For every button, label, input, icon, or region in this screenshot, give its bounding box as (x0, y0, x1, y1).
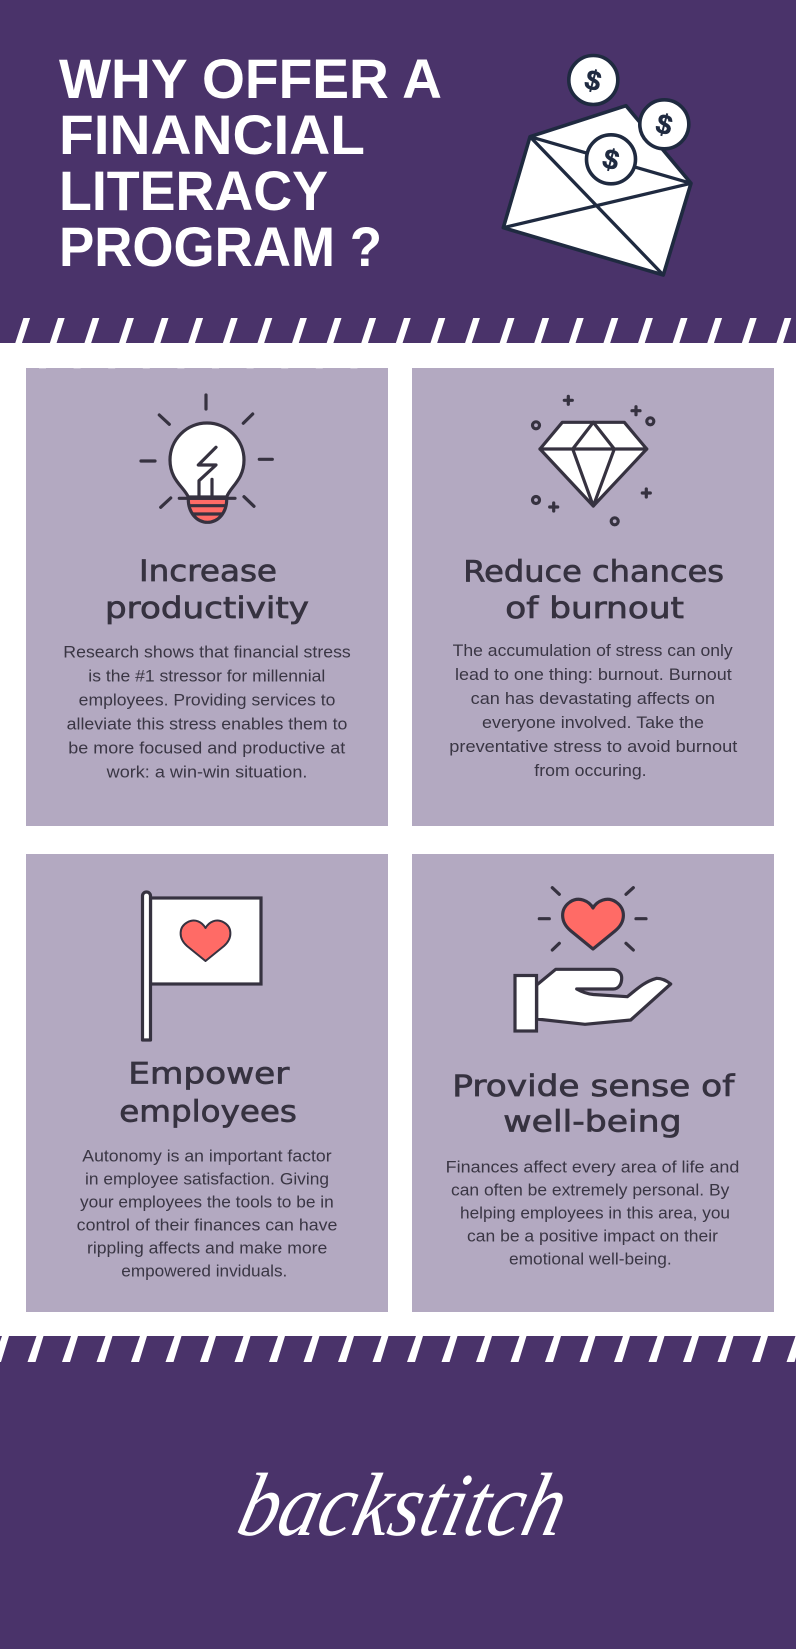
heading: Increase (139, 554, 277, 588)
body text: The accumulation of stress can only (453, 641, 733, 660)
icon: coin in envelope (586, 135, 636, 184)
body text: work: a win-win situation. (106, 762, 307, 781)
panel: increase productivity (26, 368, 388, 826)
heading: of burnout (505, 591, 684, 625)
body text (449, 641, 738, 780)
heading (452, 1069, 735, 1139)
icon: coin upper left (569, 56, 618, 104)
body text: employees. Providing services to (79, 690, 335, 709)
body text: emotional well-being. (509, 1249, 672, 1268)
icon: coin upper left: $ (582, 63, 605, 98)
body text: lead to one thing: burnout. Burnout (455, 665, 732, 684)
body text: helping employees in this area, you (460, 1203, 730, 1222)
body text: preventative stress to avoid burnout (449, 737, 738, 756)
body text (446, 1157, 739, 1268)
heading: productivity (105, 591, 309, 625)
body text (63, 642, 351, 781)
logo: backstitch: backstitch (229, 1455, 578, 1555)
icon: flag with heart (142, 892, 261, 1040)
icon: heart (181, 921, 230, 961)
body text: is the #1 stressor for millennial (88, 666, 325, 685)
body text: control of their finances can have (77, 1216, 337, 1235)
icon: diamond (532, 396, 654, 525)
body text: everyone involved. Take the (482, 713, 704, 732)
panel: provide sense of well-being (412, 854, 774, 1312)
title: WHY OFFER A (59, 47, 442, 110)
panel: reduce chances of burnout (412, 368, 774, 826)
icon: light bulb (141, 395, 272, 522)
body text: your employees the tools to be in (80, 1193, 334, 1212)
body text: alleviate this stress enables them to (67, 714, 347, 733)
title: LITERACY (59, 159, 328, 222)
icon: coin right (640, 100, 689, 149)
body text: can has devastating affects on (471, 689, 715, 708)
icon: envelope with coins (503, 56, 691, 275)
body text: Finances affect every area of life and (446, 1157, 739, 1176)
heading: Empower (128, 1057, 289, 1091)
body text: can be a positive impact on their (467, 1226, 718, 1245)
body text: Research shows that financial stress (63, 642, 351, 661)
title: FINANCIAL (59, 103, 365, 166)
heading: well-being (503, 1105, 682, 1139)
heading (463, 555, 724, 625)
body text: empowered inviduals. (121, 1262, 287, 1281)
body text: rippling affects and make more (87, 1239, 327, 1258)
icon: hand holding heart (515, 888, 671, 1031)
heading (119, 1057, 297, 1129)
title: PROGRAM ? (59, 215, 382, 278)
body text: from occuring. (534, 761, 647, 780)
heading: Provide sense of (452, 1069, 735, 1103)
body text: be more focused and productive at (68, 738, 346, 757)
header band (0, 0, 796, 344)
body text: can often be extremely personal. By (451, 1180, 730, 1199)
icon: coin in envelope: $ (599, 143, 623, 177)
body text (77, 1147, 337, 1281)
title (59, 47, 442, 278)
icon: coin right: $ (653, 108, 676, 142)
body text: Autonomy is an important factor (82, 1147, 332, 1166)
footer band (0, 1336, 796, 1649)
heading: Reduce chances (463, 555, 724, 589)
panel: empower employees (26, 854, 388, 1312)
heading (105, 554, 309, 625)
heading: employees (119, 1095, 297, 1129)
body text: in employee satisfaction. Giving (85, 1170, 329, 1189)
